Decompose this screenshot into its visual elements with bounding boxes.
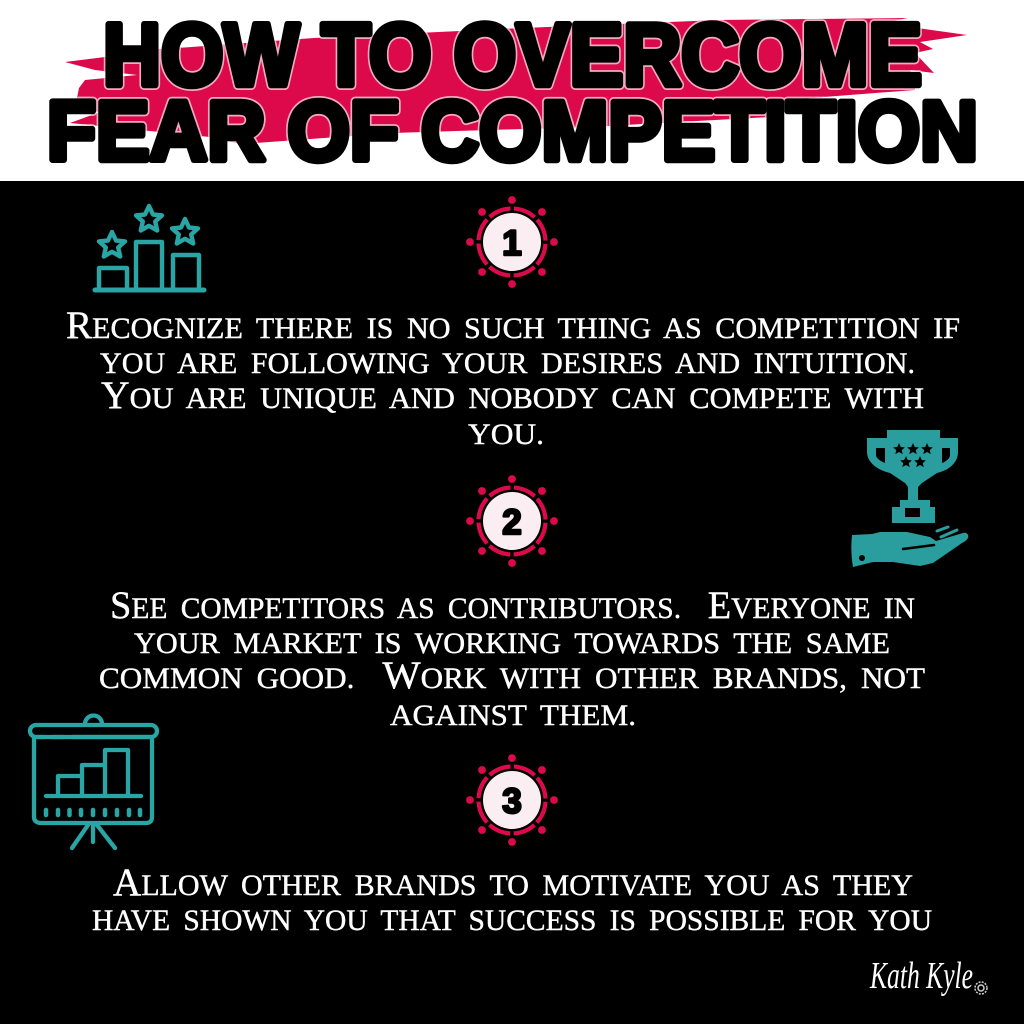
step 1 text [66,304,960,451]
signature: Kath Kyle [869,955,973,997]
step 2 text: AGAINST THEM. [390,699,636,732]
icon: podium with stars [95,206,204,290]
step 2 text: SEE COMPETITORS AS CONTRIBUTORS. EVERYONE IN [110,584,915,627]
step 3 badge: 3 [502,782,522,821]
step 3 text: ALLOW OTHER BRANDS TO MOTIVATE YOU AS THEY [113,861,913,904]
icon: small mandala [975,982,987,994]
step 3 text [92,861,932,937]
title text: HOW TO OVERCOME [103,5,922,104]
title text: FEAR OF COMPETITION [47,84,978,178]
title text [49,19,976,164]
step 1 badge [466,196,558,288]
step 2 text: YOUR MARKET IS WORKING TOWARDS THE SAME [134,627,890,660]
title text: FEAR OF COMPETITION [47,84,978,178]
step 1 text: YOU ARE FOLLOWING YOUR DESIRES AND INTUITION. [100,347,915,380]
step 1 text: YOU ARE UNIQUE AND NOBODY CAN COMPETE WITH [101,374,924,417]
title text: HOW TO OVERCOME [103,5,922,104]
step 2 badge: 2 [502,503,522,542]
red brush stroke [65,18,967,144]
step 2 text: COMMON GOOD. WORK WITH OTHER BRANDS, NOT [99,654,925,697]
step 1 text: YOU. [468,418,544,451]
title banner [49,18,976,164]
icon: presentation board with bar chart [30,716,157,848]
step 3 badge [466,754,558,846]
step 1 badge: 1 [502,224,522,263]
step 2 text [99,584,925,732]
icon: trophy on hand [851,430,968,567]
step 1 text: RECOGNIZE THERE IS NO SUCH THING AS COMPETITION IF [66,304,960,347]
step 3 text: HAVE SHOWN YOU THAT SUCCESS IS POSSIBLE FOR YOU [92,904,932,937]
step 2 badge [466,475,558,567]
